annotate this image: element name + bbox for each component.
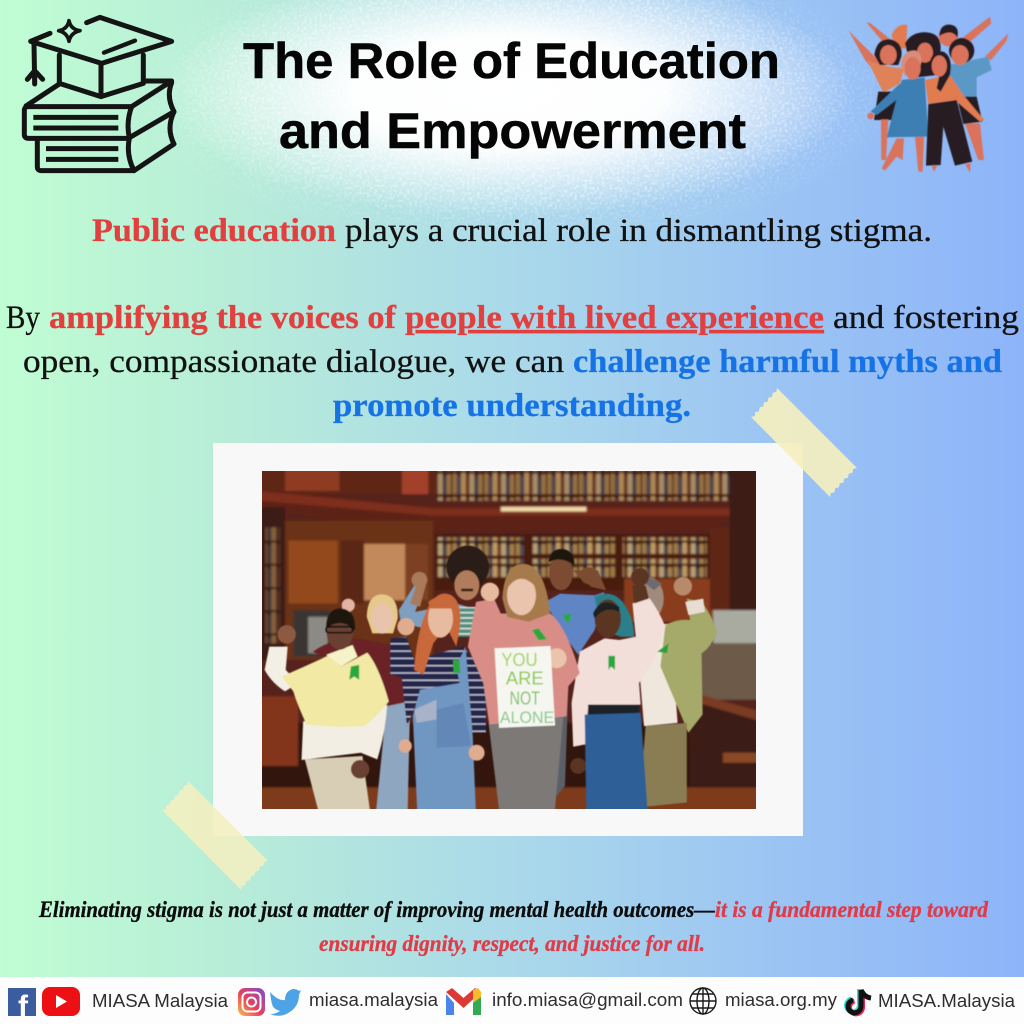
icon: youtube bbox=[42, 987, 80, 1016]
person: man in blue shirt bbox=[545, 549, 606, 806]
intro sentence bbox=[92, 213, 932, 249]
label: youtube and facebook name: MIASA Malaysia bbox=[92, 990, 229, 1011]
icon: instagram bbox=[238, 988, 265, 1016]
body paragraph: and fostering bbox=[833, 300, 1019, 336]
body paragraph: people with lived experience bbox=[405, 300, 824, 336]
icon: globe bbox=[690, 988, 716, 1014]
body paragraph: promote understanding. bbox=[333, 388, 691, 424]
closing statement: it is a fundamental step toward bbox=[715, 897, 988, 922]
title glow bbox=[127, 0, 897, 245]
sign: you are not alone: ARE bbox=[506, 668, 544, 689]
person: man in olive jacket bbox=[634, 576, 717, 807]
body paragraph: amplifying the voices of bbox=[49, 300, 397, 336]
body paragraph: open, compassionate dialogue, we can bbox=[23, 344, 564, 380]
icon: group of people cheering bbox=[848, 17, 1008, 173]
tape: bottom left bbox=[162, 781, 268, 890]
photo frame bbox=[213, 443, 803, 836]
label: instagram and twitter handle: miasa.malaysia bbox=[309, 989, 439, 1010]
label: email: info.miasa@gmail.com bbox=[492, 989, 683, 1010]
closing statement bbox=[38, 897, 988, 956]
icon: twitter bbox=[270, 989, 301, 1016]
sign: you are not alone: YOU bbox=[501, 649, 538, 670]
body paragraph: challenge harmful myths and bbox=[573, 344, 1002, 380]
sign: you are not alone: NOT bbox=[510, 688, 540, 709]
photo: group holding a sign in a library bbox=[252, 461, 766, 819]
icon: tiktok bbox=[847, 989, 871, 1014]
person: man with afro bbox=[399, 546, 489, 637]
intro sentence: plays a crucial role in dismantling stigma. bbox=[345, 213, 932, 249]
sign: you are not alone: ALONE bbox=[500, 709, 554, 727]
icon: gmail bbox=[446, 988, 481, 1015]
person: woman in pink hoodie with sign bbox=[468, 564, 580, 816]
body paragraph bbox=[6, 300, 1019, 424]
sign: you are not alone bbox=[494, 646, 555, 728]
person: woman with teal braids bbox=[570, 568, 665, 816]
room background bbox=[252, 461, 766, 819]
closing statement: Eliminating stigma is not just a matter of improving mental health outcomes— bbox=[38, 897, 715, 922]
person: red-haired woman in overalls bbox=[390, 594, 486, 816]
label: tiktok handle: MIASA.Malaysia bbox=[878, 990, 1016, 1011]
footer bar bbox=[0, 977, 1024, 1024]
person: woman in yellow sweater bbox=[265, 609, 389, 816]
icon: facebook bbox=[8, 988, 36, 1023]
person: blonde woman at back bbox=[313, 594, 410, 816]
intro sentence: Public education bbox=[92, 213, 336, 249]
title bbox=[243, 33, 780, 159]
title: and Empowerment bbox=[279, 103, 746, 159]
tape: top right bbox=[751, 388, 857, 497]
closing statement: ensuring dignity, respect, and justice for all. bbox=[319, 931, 705, 956]
people bbox=[265, 546, 717, 816]
icon: graduation cap on books bbox=[24, 17, 174, 171]
icon: facebook: f bbox=[18, 990, 29, 1023]
title: The Role of Education bbox=[243, 33, 780, 89]
body paragraph: By bbox=[6, 300, 40, 336]
label: website: miasa.org.my bbox=[725, 989, 838, 1010]
